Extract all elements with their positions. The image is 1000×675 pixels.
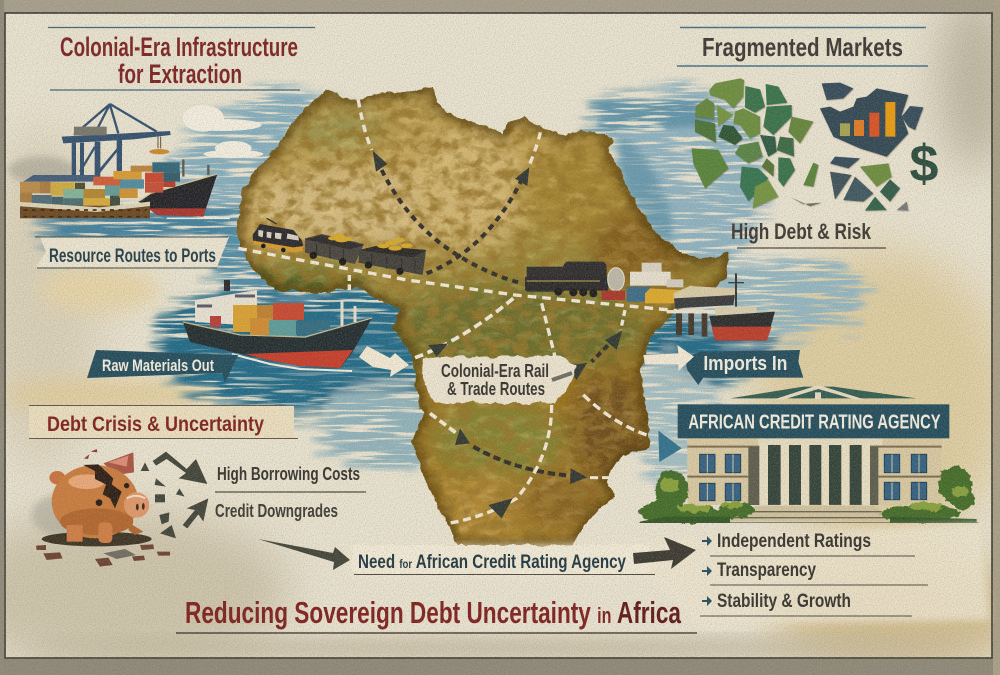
arrow: blue pointer into building bbox=[658, 431, 682, 462]
icon: fragmented map of Africa bbox=[692, 78, 818, 208]
item: Transparency: Transparency bbox=[717, 560, 816, 581]
illustration: port with crane, containers and cargo ship bbox=[8, 104, 263, 218]
debris bbox=[141, 462, 185, 538]
banner with agency name bbox=[678, 404, 949, 438]
heading: Fragmented Markets: Fragmented Markets bbox=[702, 32, 903, 62]
label: High Debt and Risk: High Debt & Risk bbox=[731, 219, 872, 244]
illustration: African Credit Rating Agency building bbox=[639, 385, 978, 523]
item: Independent Ratings: Independent Ratings bbox=[717, 531, 871, 552]
arrow and banner: Imports In bbox=[643, 345, 803, 385]
strip: lower band under the map bbox=[345, 523, 990, 625]
label: Resource Routes to Ports: Resource Routes to Ports bbox=[49, 246, 216, 267]
illustration: cracked piggy bank bbox=[32, 449, 208, 567]
building facade bbox=[687, 436, 942, 522]
banner: Raw Materials Out: Raw Materials Out bbox=[102, 356, 214, 375]
text: High Borrowing Costs: High Borrowing Costs bbox=[217, 464, 360, 484]
chart: broken debt bars with rising columns bbox=[791, 83, 923, 211]
arrows to borrowing costs and downgrades bbox=[153, 452, 208, 528]
label: Need for African Credit Rating Agency: Need for African Credit Rating Agency bbox=[358, 552, 626, 573]
bushes bbox=[640, 467, 977, 523]
label: Colonial-Era Rail and Trade Routes: & Trade Routes bbox=[447, 379, 545, 399]
illustration: cargo ship leaving with raw materials bbox=[183, 280, 372, 371]
sea washes around Africa bbox=[30, 80, 865, 490]
roof and pediment bbox=[730, 385, 917, 400]
locomotive: west diesel bbox=[253, 218, 304, 253]
arrow and banner: Imports In: Imports In bbox=[703, 352, 787, 375]
arrow: to benefits bbox=[633, 537, 696, 569]
item: Stability and Growth: Stability & Growth bbox=[717, 591, 851, 612]
heading: Debt Crisis and Uncertainty: Debt Crisis & Uncertainty bbox=[47, 413, 264, 436]
arrow: exports flow to ship bbox=[359, 346, 409, 377]
list: benefits of the agency bbox=[700, 531, 928, 616]
label: Resource Routes to Ports bbox=[35, 237, 229, 268]
heading: Colonial-Era Infrastructure for Extraction: Colonial-Era Infrastructure bbox=[60, 32, 298, 62]
title: Reducing Sovereign Debt Uncertainty in Africa: Reducing Sovereign Debt Uncertainty in Africa bbox=[185, 595, 682, 630]
heading: Fragmented Markets bbox=[677, 28, 928, 66]
heading: Debt Crisis and Uncertainty bbox=[29, 406, 298, 438]
label: Colonial-Era Rail and Trade Routes bbox=[422, 356, 577, 403]
locomotive: east steam train with cargo bbox=[525, 262, 690, 303]
item: Stability and Growth bbox=[700, 591, 912, 616]
text: Credit Downgrades: Credit Downgrades bbox=[215, 501, 338, 521]
heading: Colonial-Era Infrastructure for Extraction: for Extraction bbox=[118, 59, 242, 89]
item: Transparency bbox=[702, 560, 928, 585]
panel: Debt Crisis and Uncertainty bbox=[29, 406, 366, 567]
label: Colonial-Era Rail and Trade Routes: Colonial-Era Rail bbox=[441, 361, 549, 381]
port pier and small ship on the east coast bbox=[667, 273, 775, 341]
heading: Colonial-Era Infrastructure for Extraction bbox=[48, 28, 315, 90]
panel: Fragmented Markets bbox=[677, 28, 939, 248]
illustration: trains and cargo wagons on the rail line bbox=[253, 218, 775, 341]
arrow: to need for an agency bbox=[258, 539, 350, 570]
panel: colonial-era infrastructure bbox=[8, 28, 315, 268]
banner: Raw Materials Out bbox=[87, 350, 238, 383]
routes: dashed rail and trade lines with arrows bbox=[238, 100, 677, 523]
wagons with gold bbox=[305, 234, 426, 275]
map of Africa bbox=[210, 80, 740, 550]
label: Need for African Credit Rating Agency bbox=[352, 545, 655, 574]
icon: dollar sign: $ bbox=[910, 135, 939, 193]
